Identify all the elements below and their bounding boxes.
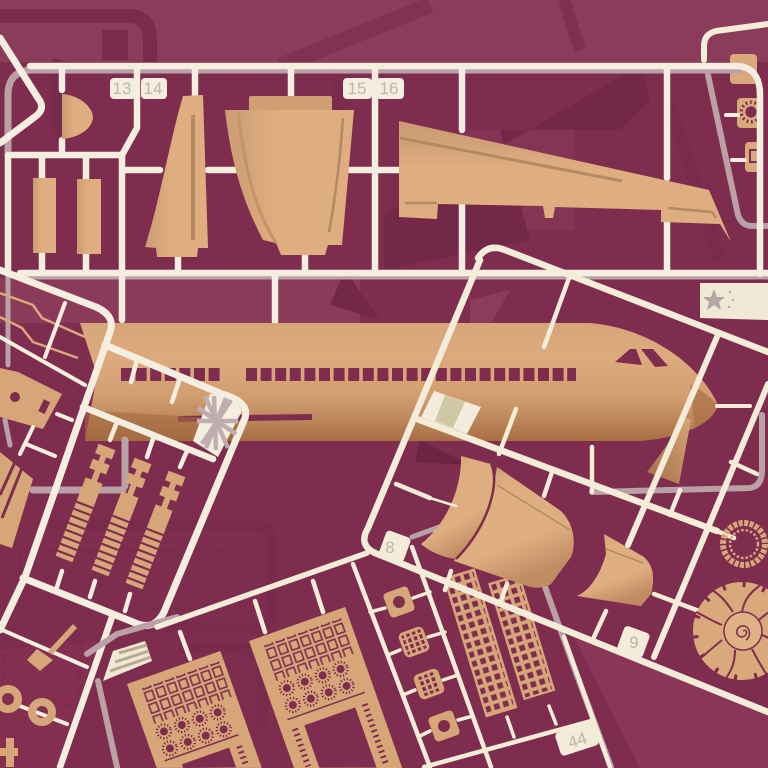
part: tail fin half [145, 95, 208, 257]
part: rod 1 [56, 444, 115, 562]
sprue: top right sheet [704, 24, 768, 226]
lower hull shading [85, 410, 240, 441]
part number tag 14: 14 [144, 79, 162, 98]
part: tail fin body [225, 96, 354, 255]
dials [155, 703, 233, 757]
sprue: bottom left sheet [0, 617, 112, 767]
part: grille strip 1 [443, 568, 517, 717]
part: turbine ring [723, 523, 765, 565]
part: rod 3 [126, 471, 185, 589]
part number tag 8: 8 [385, 538, 395, 557]
small part 1 [382, 585, 416, 619]
nose shading [690, 385, 718, 428]
part: small square dial [737, 98, 761, 128]
part number tag 8 [378, 530, 412, 563]
part: rod 2 [92, 458, 151, 576]
part number tag 14 [141, 78, 167, 99]
part: cross [0, 738, 18, 767]
sprue: top left corner [0, 38, 42, 143]
part: nose cone right [647, 417, 691, 484]
left parts: zigzag wires [0, 293, 85, 358]
part: engine 1 [421, 456, 574, 588]
part: hammer [27, 624, 77, 671]
switch grid [141, 660, 233, 724]
part number tag 9 [616, 625, 651, 659]
instrument panel 2 [249, 607, 402, 768]
sprue: right sheet [364, 248, 768, 712]
grey sprue behind right side [592, 406, 762, 492]
airplane fuselage [80, 323, 718, 441]
windows row [121, 368, 576, 381]
part: fan [696, 585, 768, 680]
part number tag 15: 15 [348, 79, 366, 98]
flag tile: star [700, 283, 768, 320]
part: cylinder right [77, 179, 101, 254]
small part 3 [412, 667, 446, 701]
engine cowl [421, 456, 494, 559]
sprue: left sheet [0, 270, 246, 630]
part number tag 44: 44 [566, 728, 589, 752]
part: ring left [0, 689, 18, 709]
part number tag 16: 16 [380, 79, 398, 98]
part: left bracket [0, 368, 62, 429]
sprue frame: top sheet [8, 66, 768, 365]
cheatline [178, 414, 312, 422]
part number tag 15 [343, 78, 372, 99]
part number tag 13: 13 [113, 79, 131, 98]
sprue: bottom panel sheet [87, 525, 611, 767]
part number tag 44 [554, 721, 600, 757]
grey shadow sprue behind left sheet [5, 420, 125, 490]
flag tile: tricolour [421, 391, 481, 434]
part: engine 2 [577, 534, 653, 606]
screen opening [182, 748, 236, 768]
instrument panel 1 [127, 651, 262, 768]
part: grille strip 2 [488, 574, 555, 700]
dials [278, 660, 356, 714]
part: left slotted plate [0, 452, 33, 548]
small part 4 [427, 709, 461, 743]
part: ring right [32, 702, 52, 722]
part number tag 9: 9 [629, 633, 639, 652]
small part 2 [397, 625, 431, 659]
part number tag 16 [376, 78, 404, 99]
switch grid [263, 617, 355, 681]
cockpit windows [615, 349, 668, 367]
part number tag 13 [110, 78, 136, 99]
part: small square top [730, 54, 757, 84]
flag tile: stripes [103, 641, 152, 681]
flag tile: starburst [193, 394, 242, 457]
screen opening [304, 707, 377, 768]
part: cylinder left [33, 178, 56, 253]
part: nose cone [62, 94, 93, 139]
part: small square slot [745, 142, 760, 172]
part: wing [399, 121, 731, 242]
